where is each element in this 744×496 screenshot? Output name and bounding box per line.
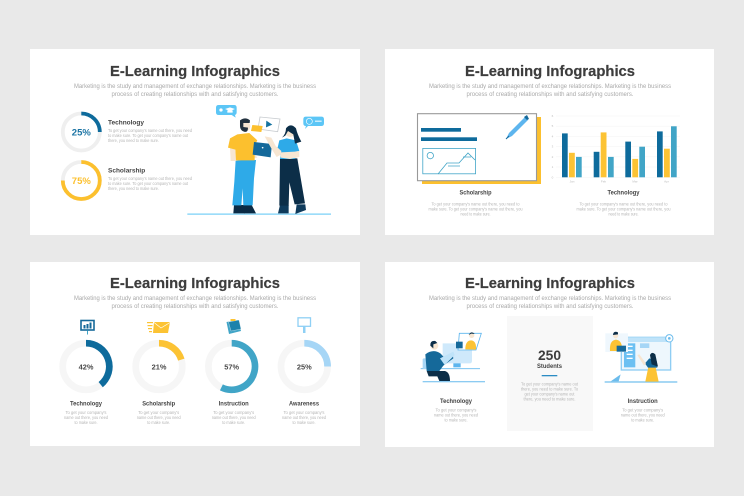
label: Instruction: To get your company's xyxy=(622,408,664,412)
icon: sign xyxy=(298,318,310,333)
bar chart: Mar xyxy=(632,180,638,184)
label: Instruction: name out there, you need xyxy=(212,415,256,420)
label: Technology: need to make sure. xyxy=(608,212,638,216)
bar chart: 4 xyxy=(552,134,554,138)
donut: 21%: 21% xyxy=(152,362,167,371)
text block: Scholarship: Scholarship xyxy=(108,168,145,174)
subtitle: process of creating relationships with and satisfying customers. xyxy=(112,303,279,310)
title: E-Learning Infographics xyxy=(465,275,635,292)
label: Technology xyxy=(576,190,671,216)
panel: top left slide xyxy=(30,49,360,235)
text block: Scholarship xyxy=(108,168,192,191)
title: E-Learning Infographics xyxy=(110,63,280,80)
label: Technology: To get your company's name out there, you need to xyxy=(580,202,668,206)
bar chart xyxy=(552,114,680,184)
subtitle: Marketing is the study and management of exchange relationships. Marketing is the business xyxy=(74,295,317,302)
label: Scholarship: Scholarship xyxy=(142,400,175,407)
label: Technology: To get your company's xyxy=(66,410,107,415)
donut: 25%: 25% xyxy=(297,362,312,371)
subtitle: process of creating relationships with and satisfying customers. xyxy=(466,91,634,98)
text block: Technology: Technology xyxy=(108,120,144,126)
subtitle: Marketing is the study and management of exchange relationships. Marketing is the business xyxy=(429,83,672,90)
illustration: two people with laptop xyxy=(187,105,331,215)
text block: Scholarship: there, you need to make sure. xyxy=(108,186,159,191)
icon: envelope xyxy=(147,322,170,333)
card illustration xyxy=(418,114,541,184)
bar chart: 5 xyxy=(552,124,554,128)
speech bubble: headset xyxy=(303,117,324,129)
bar chart: Jan xyxy=(570,180,575,184)
label: Instruction: To get your company's xyxy=(213,410,255,415)
label: Scholarship: Scholarship xyxy=(460,190,492,196)
label: Awareness xyxy=(282,400,326,425)
donut: Technology 25%: 25% xyxy=(72,128,91,138)
label: Technology: to make sure. xyxy=(444,418,468,422)
donut: 21% xyxy=(136,343,182,390)
label: Scholarship: name out there, you need xyxy=(137,415,181,420)
text block: Scholarship: to make sure. To get your company's name out xyxy=(108,181,189,186)
bar chart: 0 xyxy=(552,175,554,179)
envelope xyxy=(251,125,263,132)
subtitle xyxy=(74,295,317,310)
text block: Technology: there, you need to make sure. xyxy=(108,138,159,143)
label: Awareness: name out there, you need xyxy=(282,415,326,420)
subtitle: process of creating relationships with and satisfying customers. xyxy=(112,91,279,98)
illustration: instructor at screen xyxy=(605,332,677,383)
label: Scholarship: to make sure. xyxy=(147,420,170,425)
center card: 250 students: there, you need to make sure. To xyxy=(521,386,578,392)
speech bubble: graduation xyxy=(216,105,237,118)
label: Scholarship: To get your company's name out there, you need to xyxy=(432,202,520,206)
subtitle: Marketing is the study and management of exchange relationships. Marketing is the business xyxy=(74,83,317,90)
donut: Scholarship 75% xyxy=(63,162,100,199)
label: Technology: Technology xyxy=(70,400,102,407)
label: Instruction: Instruction xyxy=(628,398,658,405)
center card: 250 students xyxy=(507,316,593,431)
donut: 42% xyxy=(63,343,109,390)
title: E-Learning Infographics xyxy=(110,275,280,292)
center card: 250 students: To get your company's name out xyxy=(521,382,579,386)
text block: Technology: to make sure. To get your company's name out xyxy=(108,133,189,138)
label: Scholarship: make sure. To get your company's name out there, you xyxy=(428,206,523,212)
panel: bottom right slide xyxy=(385,262,714,447)
label: Technology: name out there, you need xyxy=(434,412,478,418)
label: Scholarship xyxy=(428,190,523,216)
label: Instruction xyxy=(212,400,256,425)
panel: bottom left slide xyxy=(30,262,360,446)
bar chart: Feb xyxy=(601,180,606,184)
subtitle xyxy=(429,83,672,98)
woman xyxy=(265,125,306,214)
illustration: student at computer xyxy=(421,332,485,382)
label: Awareness: Awareness xyxy=(289,400,319,407)
text block: Technology xyxy=(108,120,192,143)
text block: Technology: To get your company's name out there, you need xyxy=(108,128,192,133)
center card: 250 students: Students xyxy=(537,363,562,370)
label: Instruction: to make sure. xyxy=(631,418,654,422)
subtitle: process of creating relationships with and satisfying customers. xyxy=(466,303,634,310)
image placeholder xyxy=(423,148,476,174)
subtitle xyxy=(74,83,317,98)
donut: Scholarship 75%: 75% xyxy=(72,176,91,187)
label: Technology: make sure. To get your company's name out there, you xyxy=(576,206,671,212)
label: Awareness: To get your company's xyxy=(284,410,325,415)
center card: 250 students: get your company's name out xyxy=(524,392,575,396)
label: Technology: Technology xyxy=(440,398,472,405)
donut: 42%: 42% xyxy=(79,362,94,371)
bar chart: 2 xyxy=(552,155,554,159)
bar chart: 3 xyxy=(552,145,554,149)
donut: 57%: 57% xyxy=(224,362,240,371)
label: Technology xyxy=(434,398,478,422)
label: Technology: name out there, you need xyxy=(64,415,108,420)
label: Awareness: to make sure. xyxy=(292,420,316,425)
label: Instruction: name out there, you need xyxy=(621,412,665,418)
donut: 57% xyxy=(208,343,255,390)
label: Scholarship: need to make sure. xyxy=(460,212,490,216)
bar chart: 1 xyxy=(552,165,554,169)
icon: sticky notes xyxy=(226,319,241,334)
center card: 250 students: 250 xyxy=(538,348,561,363)
text block: Scholarship: To get your company's name out there, you need xyxy=(108,176,192,181)
bar chart: 6 xyxy=(552,114,554,118)
label: Scholarship xyxy=(137,400,181,425)
subtitle xyxy=(429,295,672,310)
man xyxy=(228,118,272,213)
donut: Technology 25% xyxy=(63,114,100,150)
label: Instruction: Instruction xyxy=(219,400,249,407)
bar chart: Apr xyxy=(664,180,669,184)
label: Technology: To get your company's xyxy=(436,408,477,412)
icon: presentation board xyxy=(81,320,94,334)
label: Technology: Technology xyxy=(608,190,640,196)
label: Technology: to make sure. xyxy=(74,420,98,425)
label: Scholarship: To get your company's xyxy=(138,410,180,415)
label: Instruction xyxy=(621,398,665,422)
video card xyxy=(258,117,280,132)
label: Technology xyxy=(64,400,108,425)
icon: pen xyxy=(506,115,529,139)
center card: 250 students: there, you need to make sure. xyxy=(524,396,576,402)
donut: 25% xyxy=(281,343,328,390)
panel: top right slide xyxy=(385,49,714,235)
label: Instruction: to make sure. xyxy=(222,420,245,425)
subtitle: Marketing is the study and management of exchange relationships. Marketing is the business xyxy=(429,295,672,302)
title: E-Learning Infographics xyxy=(465,63,635,80)
